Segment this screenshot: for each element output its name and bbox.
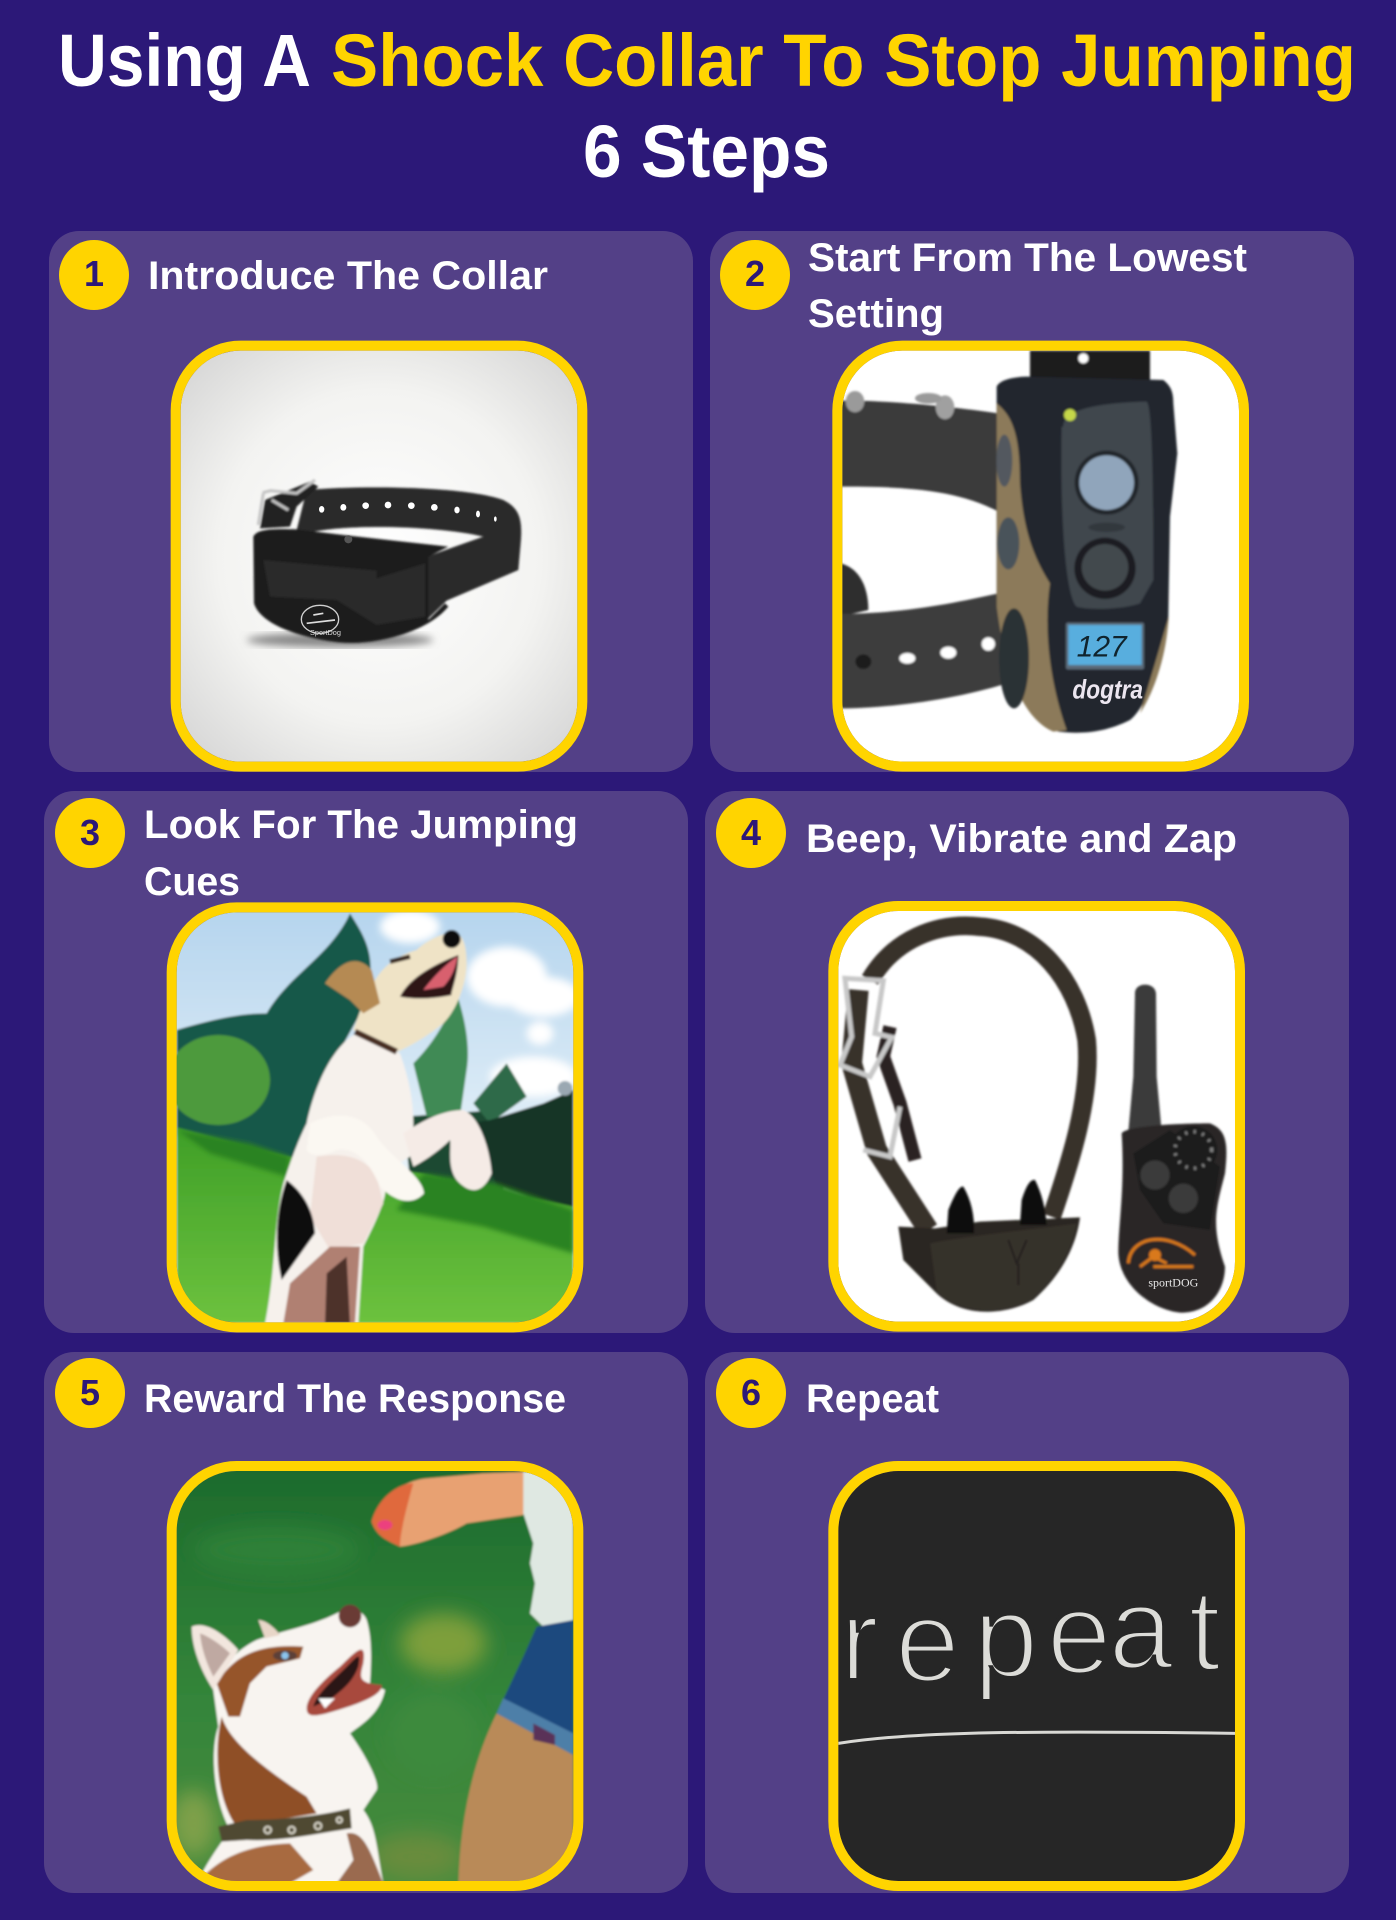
photo: husky looking up at a treat	[163, 1460, 590, 1893]
photo: dogtra remote and collar: dogtra	[1072, 674, 1143, 704]
number badge 5: 5	[80, 1372, 100, 1413]
heading: start from the lowest setting: Setting	[808, 292, 944, 336]
number badge 5	[55, 1358, 125, 1428]
photo: chalkboard reading repeat	[827, 1460, 1247, 1893]
heading: repeat: Repeat	[806, 1377, 939, 1421]
photo: sportdog collar and remote: sportDOG	[1148, 1276, 1199, 1290]
heading: reward the response: Reward The Response	[144, 1377, 566, 1421]
heading: look for the jumping cues	[144, 803, 578, 904]
photo: sportdog collar and remote	[827, 900, 1247, 1333]
heading: look for the jumping cues: Look For The Jumping	[144, 803, 578, 847]
yellow frame	[172, 907, 578, 1327]
panel: step 1 introduce the collar	[49, 231, 693, 773]
photo: dogtra remote and collar: 127	[1077, 631, 1128, 664]
photo: black bark collar on white	[170, 340, 590, 773]
number badge 1	[59, 240, 129, 310]
yellow frame	[833, 1466, 1240, 1886]
title: Using A	[58, 19, 311, 102]
number badge 4	[716, 798, 786, 868]
number badge 3	[55, 798, 125, 868]
number badge 2: 2	[745, 253, 765, 294]
photo: dogtra remote and collar	[833, 340, 1247, 773]
panel: step 5 reward the response	[44, 1352, 688, 1893]
title: 6 Steps	[583, 110, 830, 193]
panel: step 2 start from the lowest setting	[710, 231, 1354, 773]
yellow frame	[172, 1466, 578, 1886]
title	[58, 19, 1356, 193]
yellow frame	[837, 346, 1244, 767]
number badge 6	[716, 1358, 786, 1428]
heading: start from the lowest setting	[808, 236, 1247, 336]
heading: beep, vibrate and zap: Beep, Vibrate and Zap	[806, 817, 1237, 861]
yellow frame	[176, 346, 582, 767]
heading: look for the jumping cues: Cues	[144, 860, 240, 904]
chalk word: repeat	[840, 1562, 1221, 1707]
number badge 3: 3	[80, 812, 100, 853]
panel: step 3 look for the jumping cues	[44, 791, 688, 1333]
heading: start from the lowest setting: Start From The Lowest	[808, 236, 1247, 280]
panel: step 4 beep, vibrate and zap	[705, 791, 1349, 1333]
title: Shock Collar To Stop Jumping	[331, 19, 1356, 102]
number badge 6: 6	[741, 1372, 761, 1413]
yellow frame	[833, 906, 1240, 1327]
photo: jumping terrier on a lawn	[163, 903, 590, 1333]
number badge 4: 4	[741, 812, 761, 853]
number badge 2	[720, 240, 790, 310]
heading: introduce the collar: Introduce The Collar	[148, 254, 548, 298]
photo: black bark collar on white: SportDog	[310, 628, 341, 637]
panel: step 6 repeat	[705, 1352, 1349, 1893]
number badge 1: 1	[84, 253, 104, 294]
